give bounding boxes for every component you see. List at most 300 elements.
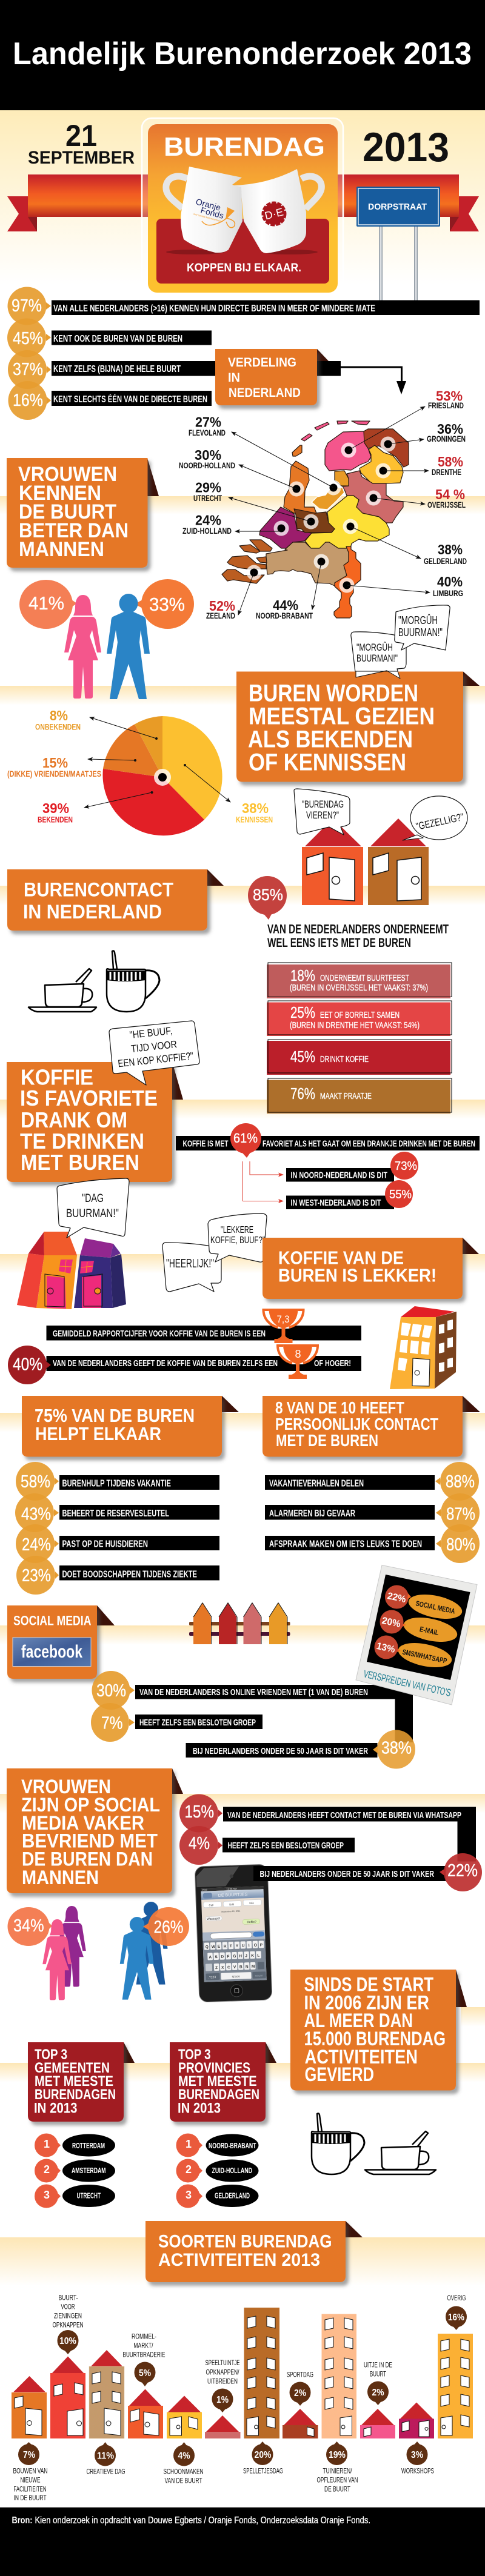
stat bar: 45% [267,1040,452,1075]
map labels: LIMBURG [433,588,463,598]
map labels: 24% [195,513,221,528]
phone keyboard: return [255,1974,263,1978]
heading: vrouwen op social media: VROUWEN [21,1776,111,1798]
pie labels: 38% [242,800,269,816]
phone keyboard: C [227,1965,230,1970]
phone with whatsapp screen: Wassup?! [207,1917,220,1921]
phone keyboard: J [245,1954,247,1958]
heading: buren worden meestal gezien: ALS BEKENDEN [248,726,413,752]
speech bubble: he buuf: EEN KOP KOFFIE?" [118,1050,194,1069]
phone with whatsapp screen: Koffie? [247,1920,256,1924]
map labels: UTRECHT [193,493,222,503]
phone keyboard: .?123 [208,1976,216,1979]
stat bar: 18%: 18% [290,966,315,984]
province: gelderland [305,496,389,548]
footer: source: Bron: [12,2515,33,2526]
stat bar: 18%: (BUREN IN OVERIJSSEL HET VAAKST: 37%) [290,983,428,993]
heading: sinds de start: 15.000 BURENDAG [304,2028,446,2050]
icon: coffee mugs: Oranje [195,196,222,213]
heading: vrouwen kennen de buurt: MANNEN [19,538,104,561]
stat: 58% burenhulp: BURENHULP TIJDENS VAKANTIE [62,1478,171,1489]
item: sms/whatsapp 13%: 13% [375,1641,396,1655]
phone keyboard: N [246,1965,249,1969]
stat: 43% reservesleutel: BEHEERT DE RESERVESLEUTEL [62,1509,169,1519]
map labels: GELDERLAND [424,556,467,566]
stat: 30% online vrienden: VAN DE NEDERLANDERS IS ONLINE VRIENDEN MET (1 VAN DE) BUREN [139,1687,368,1698]
phone with whatsapp screen: DE BUURTJES [218,1893,248,1898]
phone with whatsapp screen: Call [209,1904,213,1907]
heading: 75% helpt elkaar [22,1396,239,1456]
speech bubble: burendag vieren: VIEREN?" [306,809,339,821]
speech bubbles: morgûh buurman: "MORGÛH [398,614,438,626]
burendag badge [142,118,343,295]
building: 5% rommelmarkt: MARKT/ [133,2341,153,2349]
speech bubble: heerlijk [162,1243,221,1292]
building: 16% overig: OVERIG [447,2294,466,2302]
icon: coffee mugs: D·E [264,206,284,222]
phone with whatsapp screen: September 15, 2011 [221,1910,240,1913]
heading: social media [7,1605,115,1679]
ranking: gemeenten: AMSTERDAM [72,2166,105,2175]
colourful houses [17,1232,126,1309]
stat: 23% boodschappen: 23% [22,1566,51,1585]
heading: 75% helpt elkaar: HELPT ELKAAR [35,1423,161,1444]
figures: men 26% [120,1902,189,2000]
pie labels: BEKENDEN [38,814,73,824]
heading: top 3 provincies: MET MEESTE [178,2073,257,2090]
stat: 7% besloten groep [91,1703,263,1742]
stat: 37%: KENT ZELFS (BIJNA) DE HELE BUURT [53,364,181,374]
ranking: provincies: GELDERLAND [215,2191,250,2200]
stat: 15% whatsapp [179,1794,476,1832]
building: 4% schoonmaken: 4% [178,2451,190,2461]
speech bubble: he buuf: "HE BUUF, [129,1025,173,1041]
arrow to map [341,367,406,394]
map labels: FRIESLAND [428,400,464,410]
building: 5% rommelmarkt: BUURTBRADERIE [122,2351,165,2359]
item: social media 22%: 22% [386,1591,407,1605]
heading: vrouwen op social media [7,1768,183,1893]
map labels: 29% [195,480,221,496]
heading: vrouwen kennen de buurt: VROUWEN [18,463,117,486]
stat: 24% huisdieren: 24% [22,1535,51,1555]
building: 2% sportdag [283,2370,318,2438]
stat: 24% huisdieren: PAST OP DE HUISDIEREN [62,1539,148,1550]
icon: fence [189,1603,290,1644]
phone keyboard: R [224,1944,227,1949]
province: groningen [364,429,409,467]
stat: 7% besloten groep: 7% [101,1713,122,1733]
ranking: provincies: 2 [186,2163,192,2176]
ranking: gemeenten: 3 [44,2189,50,2201]
heading: koffie van de buren is lekker: KOFFIE VAN DE [278,1247,404,1269]
province: limburg [334,546,361,618]
building: 19% tuinieren: OPFLEUREN VAN [316,2475,358,2484]
figures: women 34%: 34% [13,1916,44,1936]
building: 11% creatieve dag: CREATIEVE DAG [86,2467,125,2475]
figure: man 33% [107,579,194,699]
text: nederlanders onderneemt [267,922,449,950]
item: social media 22% [385,1585,464,1623]
heading: social media: SOCIAL MEDIA [13,1613,92,1628]
stat: 38% onder de 50 jaar: 38% [381,1739,412,1758]
heading: top 3 gemeenten: GEMEENTEN [35,2060,110,2076]
ranking: provincies [176,2134,258,2208]
stat: west-nederland 55% [286,1180,413,1209]
heading: top 3 provincies: BURENDAGEN [178,2086,259,2103]
ranking: gemeenten: ROTTERDAM [72,2141,105,2150]
building: 2% sportdag: 2% [294,2388,306,2398]
phone keyboard: U [242,1944,245,1948]
building: 19% tuinieren: TUINIEREN/ [323,2467,352,2475]
province: friesland [301,421,371,471]
map labels: DRENTHE [432,467,461,477]
icon: mug and coffee cup [312,2113,364,2174]
stat: 23% boodschappen: DOET BOODSCHAPPEN TIJDENS ZIEKTE [62,1569,197,1580]
bar: koffie is met 61% favoriet [176,1123,480,1158]
heading: vrouwen kennen de buurt [7,458,159,568]
date: 21 september: 21 [65,119,97,153]
stat: 97%: 97% [12,296,42,316]
stat: 22% onder de 50 jaar [253,1853,482,1891]
map labels: OVERIJSSEL [427,500,466,510]
stat: 37% [8,350,341,389]
building: 7% nieuwe faciliteiten: IN DE BUURT [13,2494,47,2502]
bar: rapportcijfer 7,3: GEMIDDELD RAPPORTCIJFER VOOR KOFFIE VAN DE BUREN IS EEN [53,1329,266,1339]
phone keyboard: Z [215,1966,218,1970]
heading: buren worden meestal gezien: MEESTAL GEZIEN [249,703,435,729]
red connector lines [242,1161,283,1201]
province: drenthe [360,445,403,483]
heading: koffie van de buren is lekker: BUREN IS LEKKER! [278,1265,436,1286]
building: 7% nieuwe faciliteiten: FACILITIEITEN [13,2485,46,2494]
speech bubbles: morgûh buurman: "MORGÛH [356,642,393,653]
phone keyboard: A [209,1955,212,1959]
stat: noord-nederland 73% [286,1152,418,1181]
building: 7% nieuwe faciliteiten: NIEUWE [21,2475,40,2484]
stat: noord-nederland 73%: IN NOORD-NEDERLAND IS DIT [291,1170,387,1180]
figures: women 34% [7,1906,86,2000]
pie labels: 39% [42,800,69,816]
item: sms/whatsapp 13% [375,1636,454,1671]
stat: 88% vakantieverhalen [265,1462,479,1501]
ranking: gemeenten [35,2134,115,2208]
heading: vrouwen op social media: MANNEN [22,1867,99,1888]
heading: top 3 provincies: IN 2013 [178,2100,221,2117]
building: 4% schoonmaken [164,2395,204,2485]
building: 5% rommelmarkt: 5% [139,2368,151,2378]
phone keyboard: Y [236,1944,239,1948]
icon: coffee mugs [166,167,321,253]
building: 7% nieuwe faciliteiten: 7% [23,2450,35,2460]
map labels: 38% [438,542,463,557]
stat: 88% vakantieverhalen: 88% [446,1472,475,1492]
building: 19% tuinieren [316,2314,358,2494]
icon: trophy 8: 8 [295,1348,301,1360]
heading: koffie is favoriete drank [7,1062,183,1182]
stat: 38% onder de 50 jaar [186,1730,415,1769]
map labels: 53% [436,388,463,403]
stat: 80% afspraak maken: 80% [446,1535,475,1555]
speech bubble: heerlijk: "HEERLIJK!" [166,1257,214,1270]
heading: burencontact in nederland: BURENCONTACT [24,878,173,900]
phone keyboard: T [230,1944,232,1948]
map labels: FLEVOLAND [189,428,226,437]
street sign: DORPSTRAAT [368,202,427,212]
title banner [0,0,485,110]
balloon: 61%: 61% [233,1130,258,1146]
stat: noord-nederland 73%: 73% [395,1160,417,1173]
text: nederlanders onderneemt: WEL EENS IETS MET DE BUREN [267,936,411,950]
phone keyboard [204,1940,266,1980]
building: 10% buurtvoorzieningen [50,2294,85,2438]
heading: koffie is favoriete drank: TE DRINKEN [20,1129,144,1154]
icon: facebook logo [13,1638,91,1666]
building: 19% tuinieren: DE BUURT [324,2485,350,2494]
black connector bar [395,1685,413,1742]
speech bubbles: morgûh buurman [351,605,450,679]
heading: sinds de start: SINDS DE START [304,1974,433,1996]
stat: 97%: VAN ALLE NEDERLANDERS (>16) KENNEN HUN DIRECTE BUREN IN MEER OF MINDERE MATE [53,304,375,314]
stat: 87% alarmeren [265,1493,480,1532]
building: 2% sportdag: SPORTDAG [287,2370,313,2378]
speech bubble: dag buurman: "DAG [82,1192,104,1205]
heading: top 3 gemeenten: TOP 3 [35,2047,67,2063]
stat: 22% onder de 50 jaar: 22% [447,1861,478,1881]
icon: coffee mugs: voor sociale betrokkenheid [193,212,221,222]
stat: 80% afspraak maken: AFSPRAAK MAKEN OM IETS LEUKS TE DOEN [269,1539,422,1550]
stat: 80% afspraak maken [265,1524,480,1563]
heading: buren worden meestal gezien [236,671,480,782]
phone keyboard: E [218,1945,221,1949]
speech bubble: dag buurman [57,1178,129,1238]
heading: sinds de start: ACTIVITEITEN [304,2046,418,2068]
phone keyboard: K [251,1954,254,1958]
heading: verdeling in nederland [215,349,329,405]
phone with whatsapp screen: Edit [229,1903,235,1906]
heading: top 3 provincies: TOP 3 [178,2047,211,2063]
heading: 8 van de 10 [263,1396,480,1456]
phone keyboard: P [260,1943,263,1947]
phone keyboard: space [232,1975,240,1979]
speech bubble: burendag vieren: "BURENDAG [302,798,344,810]
stat: 4% besloten groep: HEEFT ZELFS EEN BESLOTEN GROEP [228,1841,344,1851]
heading: top 3 provincies: PROVINCIES [178,2060,250,2076]
pie labels: 8% [50,708,68,723]
map labels: GRONINGEN [427,434,466,443]
map labels: 36% [437,421,463,437]
province: zuid-holland [259,507,312,548]
phone keyboard: F [227,1954,230,1959]
speech bubble: burendag vieren [294,789,350,835]
heading: vrouwen op social media: ZIJN OP SOCIAL [21,1794,160,1816]
heading: buren worden meestal gezien: OF KENNISSEN [249,749,406,775]
province: noord-holland [284,445,316,513]
phone keyboard: M [252,1965,255,1969]
phone with whatsapp screen: Info [249,1902,254,1905]
heading: top 3 gemeenten [28,2042,135,2122]
heading: top 3 gemeenten: MET MEESTE [35,2073,113,2090]
stat bar: 76%: 76% [290,1084,315,1103]
map labels [179,388,467,620]
stat: 23% boodschappen [16,1556,219,1595]
map pins [246,436,395,593]
map labels: 58% [438,454,463,470]
speech bubble: lekkere koffie [208,1213,267,1262]
icon: coffee cup and mug [28,951,159,1012]
pie labels: ONBEKENDEN [35,722,81,732]
stat bar: 25%: EET OF BORRELT SAMEN [320,1010,400,1020]
red ribbon [7,174,479,231]
heading: koffie is favoriete drank: IS FAVORIETE [20,1086,158,1110]
stat: 4% besloten groep: 4% [189,1834,210,1853]
stat: 37%: 37% [13,360,43,379]
stat bar: 76% [267,1078,452,1114]
heading: vrouwen kennen de buurt: BETER DAN [19,519,129,542]
ranking: provincies: 1 [186,2138,192,2150]
building: 10% buurtvoorzieningen: BUURT- [58,2294,78,2302]
heading: soorten burendag activiteiten [146,2221,363,2282]
building: 1% speeltuintje: OPKNAPPEN/ [206,2368,239,2376]
building chart [12,2294,473,2502]
heading: buren worden meestal gezien: BUREN WORDEN [249,680,418,706]
map labels: 30% [195,447,221,463]
icon: trophy 7,3: 7,3 [276,1313,290,1325]
speech bubble: dag buurman: BUURMAN!" [66,1207,119,1220]
map labels: ZEELAND [206,611,235,620]
building: 3% workshops: 3% [411,2450,423,2460]
building: 20% spelletjesdag [243,2308,283,2475]
building: 1% speeltuintje: 1% [216,2395,229,2405]
map of the netherlands [179,388,467,620]
bar: 40% geeft een 8 [8,1344,361,1384]
phone keyboard: G [233,1954,236,1959]
icon: trophy 8 [277,1344,318,1379]
stat bar: 25% [267,1001,452,1036]
pie labels [7,708,273,824]
stat: 38% onder de 50 jaar: BIJ NEDERLANDERS ONDER DE 50 JAAR IS DIT VAKER [193,1746,368,1756]
year 2013: 2013 [363,124,449,170]
heading: vrouwen op social media: BEVRIEND MET [22,1830,158,1851]
map labels: 52% [209,598,235,614]
building: 2% uitje in de buurt: BUURT [370,2370,386,2378]
heading: verdeling in nederland: IN [228,371,240,385]
bar: 40% geeft een 8: VAN DE NEDERLANDERS GEEFT DE KOFFIE VAN DE BUREN ZELFS EEN [53,1358,278,1369]
stat: 43% reservesleutel [15,1493,219,1532]
phone keyboard: W [212,1945,216,1949]
bar: 40% geeft een 8: 40% [13,1355,42,1374]
heading: koffie is favoriete drank: KOFFIE [21,1065,93,1089]
phone keyboard: D [221,1955,224,1959]
phone keyboard: O [254,1944,257,1948]
building: 7% nieuwe faciliteiten [12,2376,47,2502]
balloon: 61% [230,1123,261,1158]
bar: koffie is met 61% favoriet: KOFFIE IS MET [183,1139,228,1149]
stat: 58% burenhulp: 58% [21,1472,50,1492]
ranking: provincies: ZUID-HOLLAND [212,2166,252,2175]
building: 1% speeltuintje [205,2359,240,2438]
stat bar: 18% [267,963,452,998]
stat: 58% burenhulp [16,1462,219,1501]
stat bar: 45%: DRINKT KOFFIE [320,1054,369,1064]
stat: 87% alarmeren: 87% [446,1505,475,1524]
province: noord-brabant [266,542,349,586]
heading: koffie is favoriete drank: MET BUREN [21,1150,139,1175]
building: 3% workshops: WORKSHOPS [401,2467,434,2475]
houses with doors [302,818,429,905]
pie labels: (DIKKE) VRIENDEN/MAATJES [7,769,101,778]
stat: 15% whatsapp: 15% [184,1802,214,1822]
building: 4% schoonmaken: VAN DE BUURT [165,2477,202,2485]
building: 10% buurtvoorzieningen: VOOR [61,2302,75,2311]
ranking: provincies: NOORD-BRABANT [209,2141,256,2150]
heading: soorten burendag activiteiten: SOORTEN BURENDAG [158,2232,332,2251]
item: e-mail 20%: E-MAIL [419,1625,440,1637]
phone keyboard: L [257,1954,259,1958]
item: e-mail 20%: 20% [381,1616,401,1630]
heading: 8 van de 10: MET DE BUREN [276,1431,378,1450]
heading: verdeling in nederland: VERDELING [228,356,296,370]
heading: vrouwen op social media: MEDIA VAKER [22,1812,144,1834]
building: 2% uitje in de buurt: 2% [372,2388,384,2398]
footer: source [0,2507,485,2576]
speech bubbles: morgûh buurman: BUURMAN!" [356,652,398,664]
stat: 16%: 16% [13,391,43,410]
polaroid: verspreiden van foto's [356,1565,477,1705]
stat: 45%: 45% [13,329,43,348]
phone keyboard: B [239,1965,242,1970]
stat: 30% online vrienden [92,1671,413,1710]
phone keyboard: V [233,1965,236,1970]
building: 19% tuinieren: 19% [329,2450,346,2460]
building: 5% rommelmarkt [122,2332,165,2438]
heading: sinds de start: AL MEER DAN [304,2010,413,2031]
heading: vrouwen kennen de buurt: KENNEN [19,482,101,505]
heading: 8 van de 10: PERSOONLIJK CONTACT [275,1415,438,1433]
stat: 88% vakantieverhalen: VAKANTIEVERHALEN DELEN [269,1478,364,1489]
stat: 45%: KENT OOK DE BUREN VAN DE BUREN [53,334,182,344]
speech bubble: he buuf [109,1021,199,1085]
province: flevoland [312,471,349,510]
bar: rapportcijfer 7,3 [46,1309,361,1343]
date: 21 september [28,119,135,168]
balloon: 85%: 85% [253,886,283,904]
building: 20% spelletjesdag: SPELLETJESDAG [243,2467,283,2475]
building: 1% speeltuintje: SPEELTUINTJE [205,2359,240,2367]
building: 2% uitje in de buurt: UITJE IN DE [364,2360,392,2369]
stat: 43% reservesleutel: 43% [21,1505,51,1524]
icon: coffee cup with saucer [365,2131,436,2174]
ranking: gemeenten: UTRECHT [76,2191,101,2200]
building: 20% spelletjesdag: 20% [255,2450,272,2460]
balloon: 85% [248,876,287,920]
phone keyboard: X [221,1966,224,1970]
ranking: provincies: 3 [186,2189,192,2201]
building: 16% overig: 16% [448,2312,464,2323]
stat bar: 76%: MAAKT PRAATJE [320,1091,372,1101]
map labels: ZUID-HOLLAND [182,526,232,536]
icon: coffee mugs: Fonds [199,205,225,221]
heading: verdeling in nederland: NEDERLAND [229,386,301,400]
figure: man 33%: 33% [149,594,185,615]
speech bubbles: morgûh buurman: BUURMAN!" [398,626,443,639]
icon: facebook logo: facebook [21,1642,82,1662]
heading: 75% helpt elkaar: 75% VAN DE BUREN [35,1405,195,1426]
building: 10% buurtvoorzieningen: 10% [59,2336,76,2346]
burendag badge: BURENDAG [164,132,325,162]
speech bubble: gezellig: "GEZELLIG?" [415,811,465,832]
speech bubble: lekkere koffie: KOFFIE, BUUF?" [210,1235,265,1246]
